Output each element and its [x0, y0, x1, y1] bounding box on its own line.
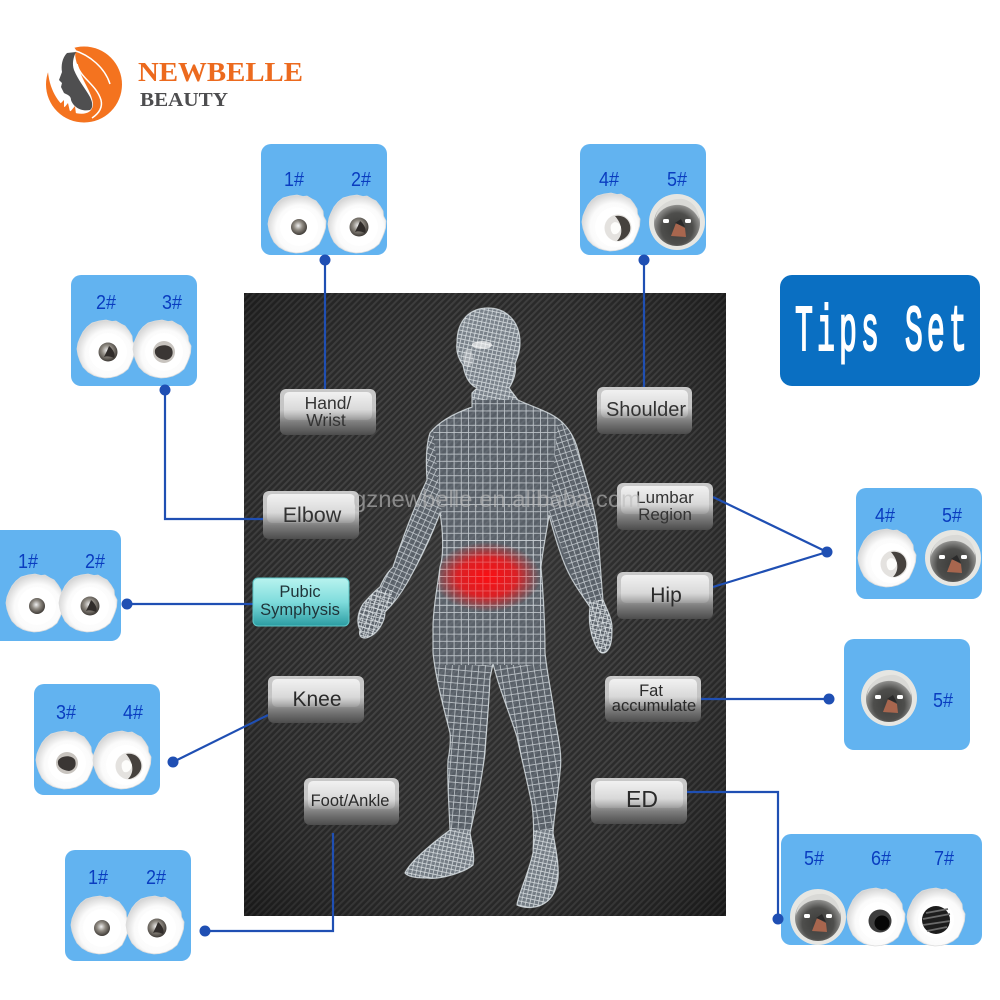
tip 4# [858, 529, 916, 587]
brand name: NEWBELLE [138, 56, 303, 87]
button: Hand/Wrist: Wrist [306, 410, 346, 430]
button: Pubic Symphysis: Symphysis [260, 601, 340, 619]
button: Shoulder [597, 387, 692, 434]
button: Hip [617, 572, 713, 619]
label 1#: 1# [284, 169, 305, 191]
button: Fat accumulate [605, 676, 701, 722]
button: Pubic Symphysis: Pubic [279, 583, 321, 601]
button: Hip: Hip [650, 584, 682, 607]
tip 4# [582, 193, 640, 251]
label 3#: 3# [162, 292, 183, 314]
connector lines [127, 260, 829, 931]
button: Fat accumulate: accumulate [612, 697, 696, 715]
button: Elbow [263, 491, 359, 539]
tip 7# [907, 888, 965, 946]
tips set badge: Tips Set [795, 297, 967, 371]
tip 6# [847, 888, 905, 946]
label 1#: 1# [88, 867, 109, 889]
label 3#: 3# [56, 702, 77, 724]
brand subtitle: BEAUTY [140, 90, 228, 111]
button: Foot/Ankle [304, 778, 399, 825]
card: ED tips 5# 6# 7# [781, 834, 982, 946]
card: Lumbar/Hip tips 4# 5# [856, 488, 982, 599]
tip 5# [925, 530, 981, 586]
facial highlights [463, 341, 492, 367]
tip 4# [93, 731, 151, 789]
card: Foot/Ankle tips 1# 2# [65, 850, 191, 961]
button: Hand/Wrist [280, 389, 376, 435]
tip 5# [861, 670, 917, 726]
card: Pubic Symphysis tips 1# 2# [0, 530, 121, 641]
button: Lumbar Region: Lumbar [636, 488, 694, 507]
label 5#: 5# [933, 690, 954, 712]
tips set badge [780, 275, 980, 386]
label 2#: 2# [96, 292, 117, 314]
tip 2# [328, 195, 386, 253]
tip 2# [77, 320, 135, 378]
tip 3# [133, 320, 191, 378]
button: Shoulder: Shoulder [606, 399, 686, 421]
logo mark [40, 44, 122, 122]
label 5#: 5# [667, 169, 688, 191]
button: Knee: Knee [292, 688, 342, 711]
label 6#: 6# [871, 848, 892, 870]
label 4#: 4# [875, 505, 896, 527]
central dark body panel [244, 293, 726, 916]
tip 1# [6, 574, 64, 632]
wireframe human body [357, 307, 613, 908]
card: Shoulder tips 4# 5# [580, 144, 706, 255]
card: Hand/Wrist tips 1# 2# [261, 144, 387, 255]
button: Knee [268, 676, 364, 723]
button: ED [591, 778, 687, 824]
button: Hand/Wrist: Hand/ [305, 393, 351, 413]
connector dots [122, 254, 834, 936]
label 5#: 5# [942, 505, 963, 527]
card: Elbow tips 2# 3# [71, 275, 197, 386]
tip 5# [649, 194, 705, 250]
label 1#: 1# [18, 551, 39, 573]
button: Foot/Ankle: Foot/Ankle [311, 792, 389, 810]
card: Fat accumulate tip 5# [844, 639, 970, 750]
button: Elbow: Elbow [283, 503, 342, 527]
label 2#: 2# [85, 551, 106, 573]
label 4#: 4# [599, 169, 620, 191]
label 5#: 5# [804, 848, 825, 870]
button: Lumbar Region: Region [638, 505, 692, 524]
button: ED: ED [626, 786, 658, 812]
tip 2# [126, 896, 184, 954]
tip 1# [71, 896, 129, 954]
label 4#: 4# [123, 702, 144, 724]
card: Knee tips 3# 4# [34, 684, 160, 795]
watermark: gznewbelle.en.alibaba.com [353, 486, 641, 512]
button: Pubic Symphysis [253, 578, 349, 626]
label 2#: 2# [146, 867, 167, 889]
tip 1# [268, 195, 326, 253]
button: Fat accumulate: Fat [639, 682, 663, 700]
label 2#: 2# [351, 169, 372, 191]
tip 2# [59, 574, 117, 632]
tip 3# [36, 731, 94, 789]
logo: Newbelle Beauty [40, 44, 303, 122]
tip 5# [790, 889, 846, 945]
label 7#: 7# [934, 848, 955, 870]
button: Lumbar Region [617, 483, 713, 530]
